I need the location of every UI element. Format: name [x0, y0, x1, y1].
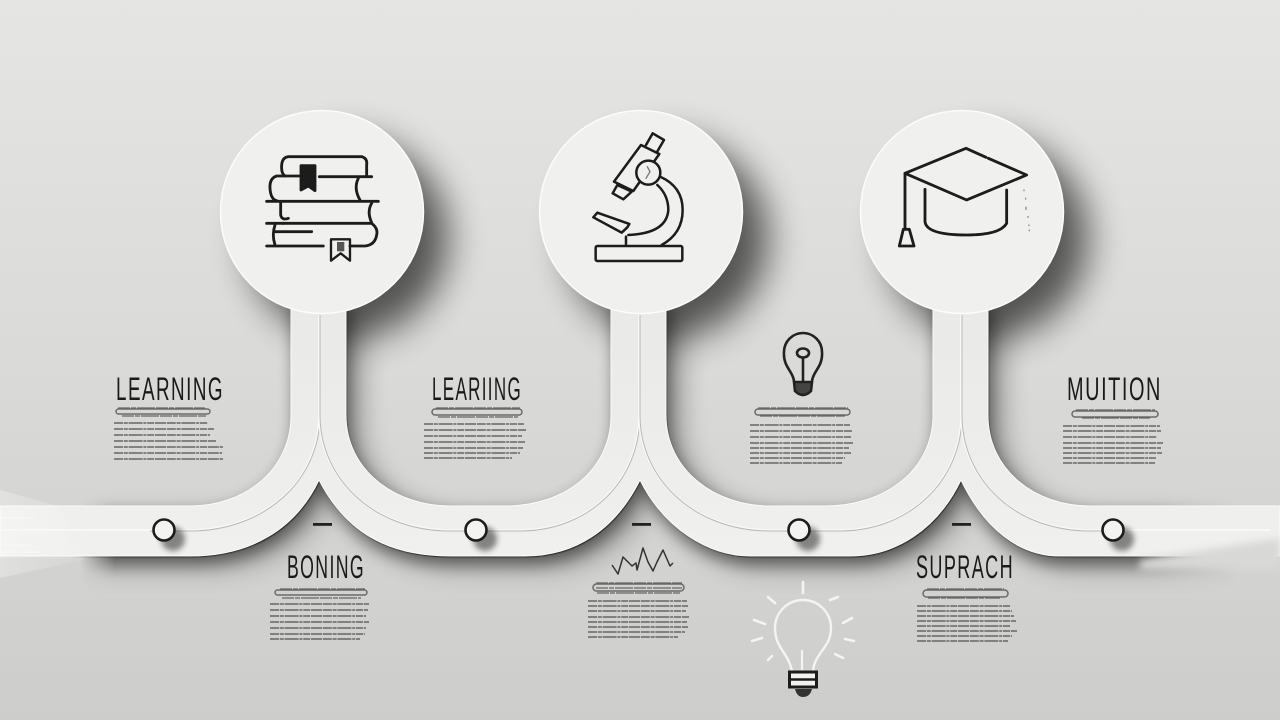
text block: MUITION	[1063, 371, 1163, 463]
text block: MUITION: MUITION	[1067, 371, 1162, 407]
text block: under sparkline	[588, 583, 689, 637]
left fan of light	[0, 490, 100, 578]
text block: BONING: BONING	[287, 549, 365, 585]
timeline node 1	[154, 520, 185, 551]
circle: graduation cap	[860, 110, 1064, 314]
text block: SUPRACH	[916, 549, 1017, 641]
circle: microscope	[540, 110, 742, 314]
icon: sparkline	[612, 548, 673, 574]
ribbon grooves	[0, 315, 1270, 531]
text block: LEARNING	[114, 371, 224, 459]
text block: under small bulb	[750, 408, 853, 463]
timeline node 2	[466, 520, 497, 551]
circle: books	[220, 110, 424, 314]
timeline node 4	[1102, 520, 1134, 551]
short dash markers	[313, 523, 971, 526]
icon: stack of books	[267, 157, 378, 261]
timeline node 3	[788, 520, 820, 551]
ribbon timeline	[0, 300, 1280, 578]
text block: BONING	[270, 549, 369, 639]
icon: graduation cap	[899, 148, 1029, 246]
icon: small light bulb	[784, 333, 822, 395]
ribbon and circle shadows	[3, 138, 1280, 568]
text block: LEARNING: LEARNING	[116, 371, 224, 407]
icon: microscope	[593, 133, 683, 261]
text block: SUPRACH: SUPRACH	[916, 549, 1014, 585]
icon: large white light bulb	[752, 582, 854, 697]
text block: LEARIING	[424, 371, 526, 458]
text block: LEARIING: LEARIING	[432, 371, 522, 407]
